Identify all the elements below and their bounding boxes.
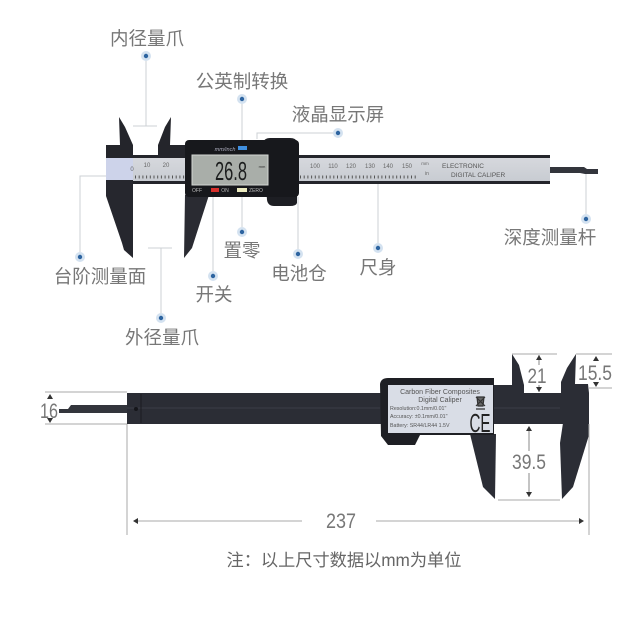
dimension: 39.5 [498,426,560,500]
dimension: 15.5 [576,354,613,388]
label: step measuring face: 台阶测量面 [54,266,146,287]
ruler numbers: 100 [310,164,321,170]
back upper right jaw [561,354,589,393]
lcd reading: 26.8 [215,156,247,186]
dimension: 237 [127,424,589,535]
back beam [127,393,589,424]
ruler numbers: 120 [346,164,357,170]
spec label: Carbon Fiber Composites [400,389,480,396]
dimension: 39.5: 39.5 [512,451,546,474]
display housing [185,140,299,197]
icon: recycling bin [476,397,485,409]
back upper left jaw [494,354,524,393]
ruler numbers: 140 [383,164,394,170]
label: ruler body: 尺身 [359,257,397,278]
dimension: 21: 21 [528,365,546,388]
ruler numbers: 110 [328,164,338,170]
sliding jaw upper [158,117,190,158]
leader lines [80,56,586,318]
footnote: 注：以上尺寸数据以mm为单位 [227,550,461,570]
label: outer jaw: 外径量爪 [125,327,199,348]
label: depth rod: 深度测量杆 [504,227,596,248]
spec label: Accuracy: ±0.1mm/0.01" [390,414,448,420]
lcd screen [192,155,268,185]
depth rod back [59,405,127,413]
mm/inch button [215,146,247,153]
ruler numbers: mm [421,161,429,166]
on off and zero buttons [192,188,263,194]
spec label: Digital Caliper [418,397,462,404]
beam printed title [442,163,505,179]
ruler numbers: 10 [144,163,151,169]
ruler numbers: 20 [163,163,170,169]
label: zero: 置零 [223,240,261,261]
spec label: Resolution:0.1mm/0.01" [390,406,446,412]
beam printed title: DIGITAL CALIPER [451,172,505,179]
dimension: 15.5: 15.5 [578,362,612,385]
label: unit switch: 公英制转换 [196,71,288,92]
label: lcd: 液晶显示屏 [292,104,384,125]
label: inner jaw: 内径量爪 [110,28,184,49]
label: power switch: 开关 [195,284,233,305]
dimension: 16 [40,392,127,424]
beam scale surface [106,158,550,181]
dimension: 16: 16 [40,400,58,423]
ruler ticks [135,176,186,178]
dimension: 21 [512,354,557,392]
label: battery compartment: 电池仓 [271,263,327,284]
caliper front view [106,117,598,258]
back lower right jaw [560,423,589,499]
ruler numbers: 130 [365,164,376,170]
ruler numbers: in [425,171,429,177]
callout dots [75,51,591,323]
spec label: Battery: SR44/LR44 1.5V [390,423,450,429]
CE mark: CE [470,408,490,438]
fixed jaw upper and head [106,117,133,158]
ruler numbers: 150 [402,164,413,170]
thumb wheels [263,138,297,206]
spec label [388,385,493,438]
caliper back view [59,354,589,499]
dimension: 237: 237 [326,510,356,533]
fixed jaw lower [106,180,133,258]
sliding jaw lower [184,195,209,258]
on off and zero buttons: OFF [192,188,202,194]
back housing [380,378,494,445]
back lower left jaw [470,434,496,499]
on off and zero buttons: ZERO [249,188,263,194]
mm/inch button: mm/inch [215,147,235,153]
beam printed title: ELECTRONIC [442,163,484,170]
ruler numbers: 0 [130,167,134,173]
caliper front view: mm [259,164,266,169]
main beam [106,155,550,184]
depth rod [550,167,598,174]
on off and zero buttons: ON [221,188,229,194]
ruler numbers [130,161,429,177]
